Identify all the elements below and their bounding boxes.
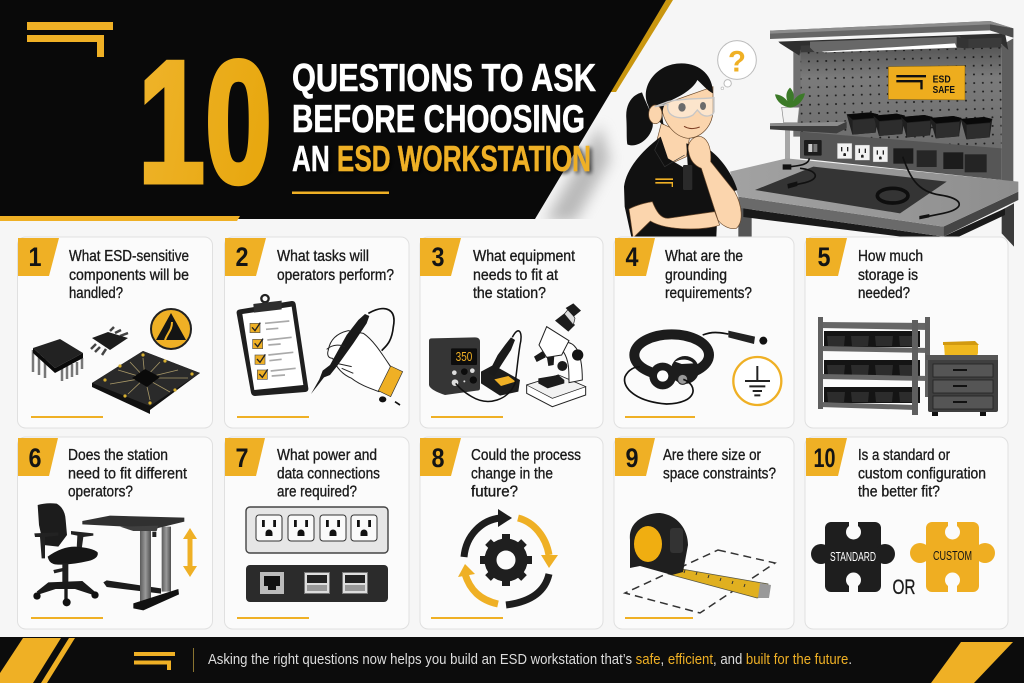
icon: data port strip — [246, 565, 388, 602]
badge 5: 5 — [818, 242, 830, 272]
badge 2 — [225, 238, 266, 276]
icon: checklist clipboard — [237, 295, 308, 396]
icon: power outlets strip — [246, 507, 388, 553]
closing statement: Asking the right questions now helps you build an ESD workstation that’s safe, efficient, and built for the future. — [208, 651, 852, 668]
question text: storage is — [858, 267, 918, 284]
badge 3: 3 — [432, 242, 444, 272]
accent line — [31, 617, 103, 619]
badge 1 — [18, 238, 59, 276]
panel: question 9 — [614, 437, 794, 629]
question text: handled? — [69, 285, 123, 302]
question text: How much — [858, 248, 923, 265]
shelf post — [785, 130, 790, 162]
title — [292, 57, 596, 179]
badge 8: 8 — [432, 443, 444, 473]
title: QUESTIONS TO ASK — [292, 57, 596, 100]
ear — [649, 105, 662, 124]
question text: needs to fit at — [473, 267, 559, 284]
question text: What power and — [277, 447, 377, 464]
yellow strip — [0, 216, 240, 221]
badge 7: 7 — [236, 443, 248, 473]
panel: question 7 — [224, 437, 409, 629]
shirt logo — [655, 178, 673, 187]
bench legs — [738, 203, 1014, 247]
question text: Are there size or — [663, 447, 761, 464]
icon: soldering station — [429, 331, 521, 401]
thought bubble: ? — [728, 45, 746, 78]
footer banner — [0, 637, 1024, 683]
question text: components will be — [69, 267, 189, 284]
task light — [810, 37, 968, 52]
right stripe — [931, 642, 1013, 683]
ESD SAFE sign — [888, 66, 965, 100]
parts bins — [847, 112, 992, 139]
icon: puzzle piece standard: STANDARD — [830, 549, 876, 564]
footer logo — [134, 652, 175, 670]
question text: need to fit different — [68, 466, 188, 482]
illustration: workbench — [730, 21, 1018, 247]
question text — [471, 447, 581, 500]
thought bubble — [718, 41, 756, 90]
question text: Does the station — [68, 447, 168, 464]
badge 4 — [615, 238, 655, 276]
question text: What equipment — [473, 248, 576, 265]
question text: requirements? — [665, 285, 752, 302]
diagonal shadow — [545, 125, 610, 222]
accent line — [431, 617, 503, 619]
pegboard — [800, 47, 1002, 150]
question text — [473, 248, 576, 302]
question text — [68, 447, 188, 500]
hair — [646, 63, 713, 125]
badge 7 — [225, 438, 265, 476]
power outlets — [804, 140, 987, 172]
panel: question 10 — [805, 437, 1008, 629]
question text: data connections — [277, 466, 380, 482]
icon: tape measure — [630, 513, 771, 598]
question text: needed? — [858, 285, 910, 302]
brand logo — [27, 22, 113, 57]
question text: the better fit? — [858, 484, 940, 500]
title underline — [292, 192, 389, 194]
left thin stripe — [41, 638, 75, 683]
uprights — [1002, 38, 1013, 183]
divider — [193, 648, 194, 672]
diagonal yellow stripe — [609, 0, 673, 92]
ponytail — [626, 92, 653, 145]
icon: gloved hand with soldering iron — [311, 309, 403, 405]
question text: Is a standard or — [858, 447, 950, 464]
badge 2: 2 — [236, 242, 248, 272]
icon: height adjustable desk — [82, 516, 184, 610]
badge 9: 9 — [626, 443, 638, 473]
ESD SAFE sign: ESD — [933, 75, 951, 86]
technician — [624, 63, 741, 237]
arms and hand — [629, 136, 741, 237]
question text: change in the — [471, 466, 553, 482]
question text — [663, 447, 776, 482]
accent line — [237, 416, 309, 418]
panel: question 1 — [18, 237, 212, 428]
icon: drawer cabinet and box — [926, 341, 998, 416]
title: AN ESD WORKSTATION — [292, 138, 591, 179]
placket — [683, 165, 692, 190]
badge 8 — [420, 438, 461, 476]
question text: operators perform? — [277, 267, 394, 284]
panel: question 4 — [614, 237, 794, 428]
OR label: OR — [892, 576, 916, 599]
question text — [858, 248, 923, 302]
accent line — [237, 617, 309, 619]
icon: office chair — [33, 503, 99, 606]
ESD SAFE sign: SAFE — [933, 85, 955, 96]
neck — [655, 123, 690, 165]
icon: adjust height arrow — [183, 528, 197, 577]
accent line — [625, 416, 695, 418]
badge 6: 6 — [28, 443, 42, 473]
icon: microchips — [33, 327, 128, 381]
badge 1: 1 — [28, 242, 42, 272]
shirt — [624, 137, 737, 237]
side shelf — [770, 122, 847, 133]
title: BEFORE CHOOSING — [292, 98, 585, 141]
question text: custom configuration — [858, 466, 986, 482]
panel: question 8 — [420, 437, 603, 629]
panel: question 5 — [805, 237, 1008, 428]
panel: question 6 — [18, 437, 212, 629]
icon: puzzle piece custom — [910, 521, 995, 593]
badge 4: 4 — [626, 242, 638, 272]
accent line — [31, 416, 103, 418]
question text: What ESD-sensitive — [69, 248, 189, 265]
accent line — [431, 416, 503, 418]
black panel — [0, 0, 666, 219]
badge 5 — [806, 238, 847, 276]
icon: ESD warning symbol — [151, 309, 191, 349]
icon: gear with change cycle — [458, 509, 558, 605]
ESD mat — [755, 167, 947, 213]
badge 3 — [420, 238, 461, 276]
icon: dashed footprint — [625, 550, 775, 613]
cord plugs — [783, 164, 929, 219]
panel: question 2 — [224, 237, 409, 428]
left stripes — [0, 638, 61, 683]
icon: ground symbol — [733, 357, 781, 405]
question text: space constraints? — [663, 466, 776, 482]
safety glasses — [655, 98, 714, 118]
question text: operators? — [68, 484, 133, 500]
gear — [480, 534, 532, 586]
icon: circuit board — [92, 351, 200, 414]
icon: puzzle piece standard — [811, 521, 895, 593]
question text — [277, 447, 380, 500]
icon: microscope — [527, 303, 586, 407]
header banner — [0, 0, 673, 239]
collar — [655, 138, 685, 167]
question text: grounding — [665, 267, 727, 284]
coiled cord — [877, 188, 908, 203]
big number 10: 10 — [138, 24, 272, 219]
question text — [665, 248, 752, 302]
face — [661, 87, 713, 138]
question text — [858, 447, 986, 500]
badge 10 — [806, 438, 847, 476]
icon: wrist strap — [625, 331, 767, 404]
ground cords — [783, 157, 959, 218]
question text — [69, 248, 189, 302]
icon: storage shelving — [818, 317, 930, 415]
badge 6 — [18, 438, 58, 476]
question text: the station? — [473, 285, 546, 302]
icon: soldering station: 350 — [456, 350, 472, 364]
badge 10: 10 — [814, 443, 836, 473]
question text: are required? — [277, 484, 357, 500]
question text — [277, 248, 394, 284]
power strip — [800, 132, 1002, 180]
panel: question 3 — [420, 237, 603, 428]
question text: future? — [471, 484, 518, 500]
overhead shelf — [770, 21, 1013, 56]
potted plant — [775, 88, 805, 123]
eyes and mouth — [678, 102, 706, 129]
icon: puzzle piece custom: CUSTOM — [933, 548, 972, 563]
desk — [730, 158, 1018, 242]
accent line — [625, 617, 693, 619]
question text: What are the — [665, 248, 743, 265]
question text: Could the process — [471, 447, 581, 464]
question text: What tasks will — [277, 248, 369, 265]
badge 9 — [615, 438, 655, 476]
